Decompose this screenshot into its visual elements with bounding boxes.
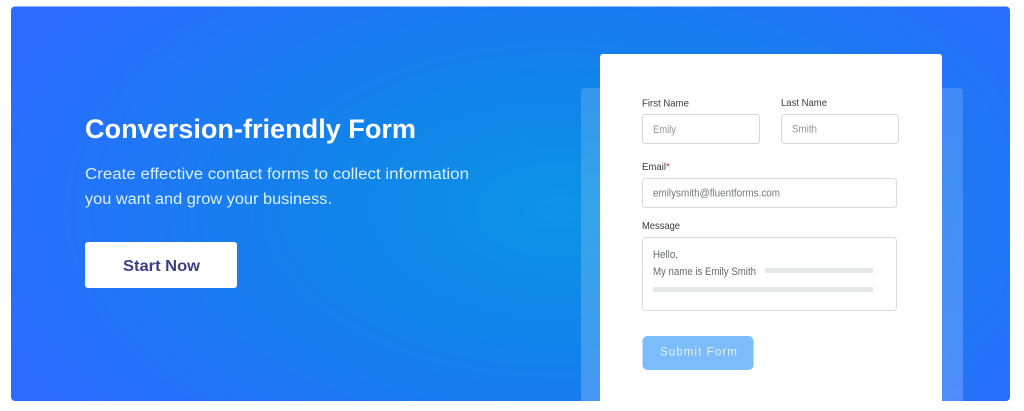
field: message bbox=[642, 220, 896, 310]
field: first name: First Name bbox=[642, 98, 689, 110]
field: message: My name is Emily Smith bbox=[653, 266, 756, 278]
field: email bbox=[642, 161, 896, 208]
button: start now: Start Now bbox=[123, 258, 201, 275]
field: email: emilysmith@fluentforms.com bbox=[653, 188, 780, 200]
field: message: Message bbox=[642, 220, 680, 232]
description text bbox=[85, 166, 469, 208]
field: last name bbox=[781, 97, 898, 144]
heading: Conversion-friendly Form bbox=[85, 114, 416, 144]
description text: Create effective contact forms to collect information bbox=[85, 166, 469, 183]
field: first name: Emily bbox=[653, 124, 676, 136]
field: email: * bbox=[666, 162, 670, 173]
button: submit form: Submit Form bbox=[660, 346, 737, 358]
field: last name: Smith bbox=[792, 124, 817, 136]
field: message: Hello, bbox=[653, 249, 678, 261]
button: submit form bbox=[642, 336, 754, 370]
field: first name bbox=[642, 98, 760, 144]
field: last name: Last Name bbox=[781, 97, 827, 109]
field: email: Email bbox=[642, 161, 666, 173]
button: start now bbox=[85, 242, 237, 288]
form card bbox=[600, 54, 942, 401]
translucent backing panel bbox=[581, 88, 963, 401]
description text: you want and grow your business. bbox=[85, 191, 332, 208]
